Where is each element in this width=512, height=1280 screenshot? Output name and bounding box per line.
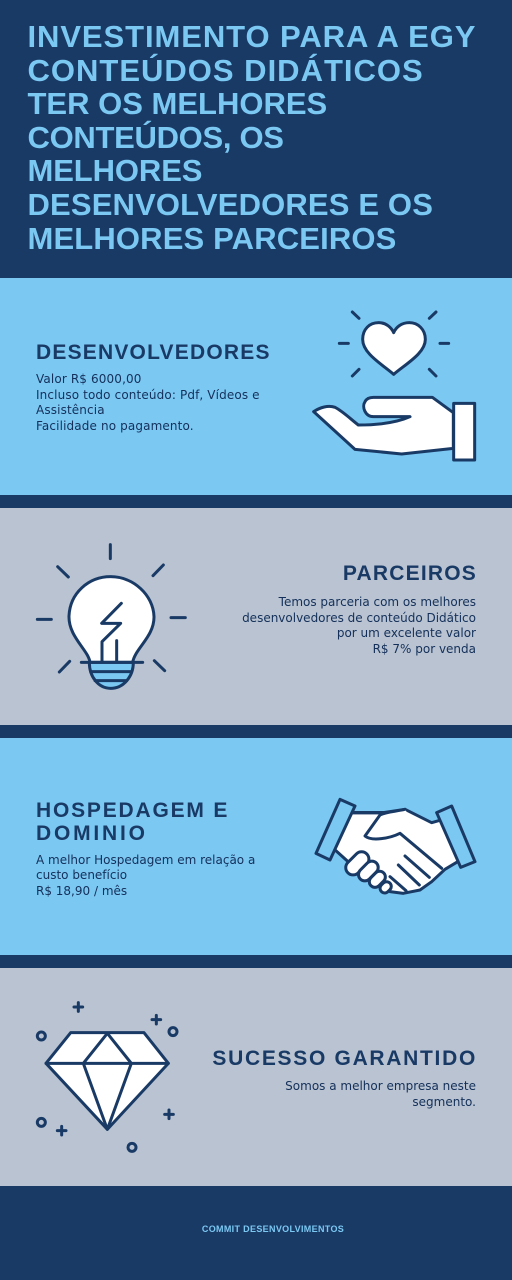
title: [28, 19, 476, 256]
icon: hand holding heart: [312, 310, 476, 462]
title: CONTEÚDOS, OS: [28, 120, 284, 155]
heading: hospedagem e dominio: [36, 799, 229, 845]
text: hospedagem: [36, 852, 255, 898]
icon: diamond: [36, 1001, 178, 1153]
footer text: COMMIT DESENVOLVIMENTOS: [202, 1224, 344, 1234]
icon: light bulb: [36, 543, 187, 690]
panel: sucesso garantido: [0, 968, 512, 1186]
text: desenvolvedores: Facilidade no pagamento.: [36, 418, 194, 432]
title: MELHORES PARCEIROS: [28, 221, 396, 256]
title: CONTEÚDOS DIDÁTICOS: [28, 53, 424, 88]
heading: sucesso garantido: SUCESSO GARANTIDO: [212, 1047, 477, 1070]
panel: desenvolvedores: [0, 278, 512, 495]
text: parceiros: desenvolvedores de conteúdo Didático: [242, 610, 476, 624]
text: sucesso: [285, 1079, 476, 1108]
panel: parceiros: [0, 508, 512, 725]
heading: hospedagem e dominio: HOSPEDAGEM E: [36, 799, 229, 822]
panel: hospedagem e dominio: [0, 738, 512, 955]
title: MELHORES: [28, 153, 202, 188]
title: DESENVOLVEDORES E OS: [28, 187, 433, 222]
text: desenvolvedores: [36, 372, 260, 432]
text: desenvolvedores: Assistência: [36, 403, 105, 417]
text: hospedagem: R$ 18,90 / mês: [36, 884, 127, 898]
heading: desenvolvedores: DESENVOLVEDORES: [36, 341, 271, 364]
text: hospedagem: custo benefício: [36, 868, 127, 882]
text: parceiros: por um excelente valor: [337, 626, 476, 640]
text: desenvolvedores: Incluso todo conteúdo: Pdf, Vídeos e: [36, 388, 260, 402]
text: parceiros: [242, 595, 476, 656]
heading: parceiros: PARCEIROS: [343, 562, 477, 585]
text: sucesso: Somos a melhor empresa neste: [285, 1079, 476, 1093]
text: sucesso: segmento.: [412, 1094, 476, 1108]
title: TER OS MELHORES: [28, 86, 327, 121]
text: parceiros: Temos parceria com os melhores: [279, 595, 476, 609]
title: INVESTIMENTO PARA A EGY: [28, 19, 476, 54]
heading: hospedagem e dominio: DOMINIO: [36, 822, 148, 845]
text: hospedagem: A melhor Hospedagem em relação a: [36, 852, 255, 866]
text: desenvolvedores: Valor R$ 6000,00: [36, 372, 142, 386]
text: parceiros: R$ 7% por venda: [373, 642, 476, 656]
icon: handshake: [314, 798, 476, 895]
